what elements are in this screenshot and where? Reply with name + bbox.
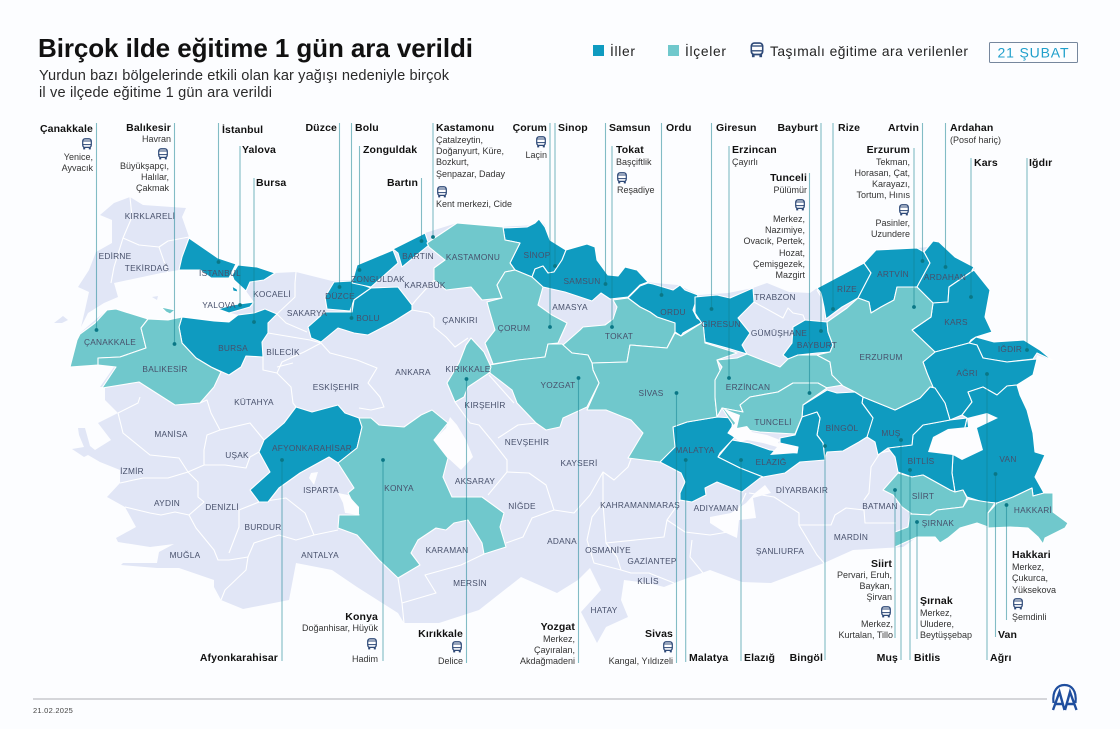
province labels: MUŞ: [881, 428, 901, 438]
legend: iller: [593, 42, 635, 59]
callout: Malatya: Malatya: [689, 652, 728, 664]
callout: Erzurum: Uzundere: [871, 229, 910, 239]
legend: iller: İller: [610, 42, 635, 59]
subtitle: Yurdun bazı bölgelerinde etkili olan kar yağışı nedeniyle birçok: [39, 68, 450, 84]
callout: Erzurum: Horasan, Çat,: [854, 168, 910, 178]
callout: Artvin: Artvin: [888, 122, 919, 134]
callout: Ağrı: Ağrı: [990, 652, 1011, 664]
callout: Balıkesir: Halılar,: [141, 172, 169, 182]
province labels: BARTIN: [402, 251, 434, 261]
callout: Balıkesir: Havran: [142, 134, 171, 144]
callout: Çanakkale: Çanakkale: [40, 123, 93, 135]
callout: Çorum: Çorum: [513, 122, 547, 134]
province labels: ŞIRNAK: [922, 518, 954, 528]
province labels: ERZURUM: [859, 352, 903, 362]
date box: 21 ŞUBAT: [998, 44, 1069, 60]
province labels: RİZE: [837, 284, 857, 294]
province labels: DÜZCE: [325, 291, 355, 301]
callout: Erzurum: [854, 144, 910, 239]
province labels: TEKİRDAĞ: [125, 263, 169, 273]
province labels: ANKARA: [395, 367, 431, 377]
callout: Kastamonu: Doğanyurt, Küre,: [436, 146, 504, 156]
callout: Sivas: Sivas: [645, 628, 673, 640]
province labels: KAHRAMANMARAŞ: [600, 500, 680, 510]
province labels: ŞANLIURFA: [756, 546, 804, 556]
province labels: GÜMÜŞHANE: [751, 328, 807, 338]
callout: Tunceli: Tunceli: [770, 172, 807, 184]
callout: Siirt: [837, 558, 893, 640]
callout: Hakkari: Şemdinli: [1012, 612, 1047, 622]
province labels: ÇORUM: [498, 323, 530, 333]
province labels: BİTLİS: [908, 456, 935, 466]
province labels: MARDİN: [834, 532, 868, 542]
callout: Afyonkarahisar: Afyonkarahisar: [200, 652, 278, 664]
province labels: SAKARYA: [287, 308, 327, 318]
province labels: BURSA: [218, 343, 248, 353]
province labels: AFYONKARAHİSAR: [272, 443, 352, 453]
callout: Bartın: Bartın: [387, 177, 418, 189]
callout: Siirt: Şirvan: [866, 592, 892, 602]
logo: AA: [1053, 685, 1076, 710]
callout: Balıkesir: Büyükşapçı,: [120, 161, 169, 171]
province labels: SİNOP: [523, 250, 551, 260]
date: 21.02.2025: [33, 706, 73, 715]
callout: İstanbul: İstanbul: [222, 123, 263, 136]
province labels: MUĞLA: [170, 550, 201, 560]
province labels: KIRKLARELİ: [125, 211, 175, 221]
callout: Yozgat: Çayıralan,: [534, 645, 575, 655]
callout: Elazığ: Elazığ: [744, 652, 775, 664]
callout: Şırnak: Şırnak: [920, 595, 953, 607]
callout: Tunceli: [743, 172, 807, 280]
callout: Tokat: Tokat: [616, 144, 644, 156]
callouts: northern provinces: [40, 122, 1052, 280]
callout: Çorum: [513, 122, 547, 160]
province labels: KÜTAHYA: [234, 397, 274, 407]
callout: Kastamonu: Kent merkezi, Cide: [436, 199, 512, 209]
callout: Siirt: Pervari, Eruh,: [837, 570, 892, 580]
province labels: EDİRNE: [99, 251, 132, 261]
callout: Iğdır: Iğdır: [1029, 157, 1052, 169]
province labels: GİRESUN: [701, 319, 741, 329]
callout: Tokat: Başçiftlik: [616, 157, 652, 167]
province labels: AYDIN: [154, 498, 180, 508]
province labels: MERSİN: [453, 578, 487, 588]
callout: Siirt: Merkez,: [861, 619, 893, 629]
province labels: KIRŞEHİR: [464, 400, 506, 410]
province labels: [84, 211, 1052, 615]
callout: Bingöl: Bingöl: [790, 652, 823, 664]
province labels: SİİRT: [912, 491, 934, 501]
province labels: DİYARBAKIR: [776, 485, 828, 495]
province labels: ARDAHAN: [924, 272, 966, 282]
province labels: ADIYAMAN: [694, 503, 738, 513]
callout: Yalova: Yalova: [242, 144, 276, 156]
province labels: TRABZON: [754, 292, 796, 302]
title: Birçok ilde eğitime 1 gün ara verildi: [38, 33, 473, 63]
map of Turkey: [54, 123, 1068, 663]
province labels: ARTVİN: [877, 269, 909, 279]
province borders: [111, 197, 896, 623]
province labels: BURDUR: [244, 522, 282, 532]
callout: Erzincan: Erzincan: [732, 144, 777, 156]
province labels: YALOVA: [202, 300, 236, 310]
callout: Balıkesir: [120, 122, 171, 193]
callout: Çanakkale: [40, 123, 93, 173]
callout: Erzurum: Erzurum: [867, 144, 910, 156]
province labels: HAKKARİ: [1014, 505, 1052, 515]
callout: Sivas: [609, 628, 673, 666]
callout: Hakkari: [1012, 549, 1056, 622]
province labels: KASTAMONU: [446, 252, 500, 262]
legend: taşımalı eğitim: Taşımalı eğitime ara verilenler: [770, 44, 968, 59]
callout: Bayburt: Bayburt: [777, 122, 818, 134]
province labels: ADANA: [547, 536, 577, 546]
province labels: BAYBURT: [797, 340, 837, 350]
province labels: VAN: [999, 454, 1017, 464]
callout: Siirt: Siirt: [871, 558, 892, 570]
province labels: AĞRI: [956, 368, 978, 378]
province labels: KONYA: [384, 483, 414, 493]
callout: Kastamonu: [436, 122, 512, 209]
callout: Tunceli: Mazgirt: [775, 270, 805, 280]
callout: Kars: Kars: [974, 157, 998, 169]
callout: Hakkari: Çukurca,: [1012, 573, 1048, 583]
callout: Zonguldak: Zonguldak: [363, 144, 417, 156]
province labels: MALATYA: [675, 445, 715, 455]
callout: Bolu: Bolu: [355, 122, 379, 134]
callout: Çorum: Laçin: [525, 150, 547, 160]
callout: Tunceli: Merkez,: [773, 214, 805, 224]
callout: Tokat: Reşadiye: [617, 185, 655, 195]
province labels: KİLİS: [637, 576, 659, 586]
callouts: southern provinces: [200, 549, 1056, 666]
callout: Van: Van: [998, 629, 1017, 641]
province labels: BOLU: [356, 313, 380, 323]
province labels: YOZGAT: [540, 380, 576, 390]
province labels: ESKİŞEHİR: [313, 382, 359, 392]
callout: Tunceli: Çemişgezek,: [753, 259, 805, 269]
callout: Kırıkkale: Delice: [438, 656, 463, 666]
province labels: BALIKESİR: [142, 364, 188, 374]
callout: Bursa: Bursa: [256, 177, 286, 189]
province labels: BİLECİK: [266, 347, 300, 357]
leader lines: [96, 123, 1027, 663]
callout: Ardahan: [950, 122, 1001, 145]
callout: Ordu: Ordu: [666, 122, 692, 134]
province labels: AMASYA: [552, 302, 588, 312]
province labels: ERZİNCAN: [726, 382, 770, 392]
callout: Konya: Doğanhisar, Hüyük: [302, 623, 378, 633]
callout: Erzurum: Tekman,: [876, 157, 910, 167]
callout: Rize: Rize: [838, 122, 860, 134]
province labels: BATMAN: [862, 501, 898, 511]
province labels: ÇANAKKALE: [84, 337, 136, 347]
callout: Tokat: [616, 144, 655, 195]
callout: Erzurum: Karayazı,: [872, 179, 910, 189]
province labels: BİNGÖL: [826, 423, 859, 433]
province labels: ZONGULDAK: [351, 274, 405, 284]
callout: Yozgat: [520, 621, 575, 666]
callout: Şırnak: Merkez,: [920, 608, 952, 618]
callout: Hakkari: Merkez,: [1012, 562, 1044, 572]
callout: Tunceli: Ovacık, Pertek,: [743, 236, 805, 246]
province labels: OSMANİYE: [585, 545, 631, 555]
callout: Ardahan: Ardahan: [950, 122, 993, 134]
province labels: İSTANBUL: [199, 268, 241, 278]
callout: Ardahan: (Posof hariç): [950, 135, 1001, 145]
province labels: IĞDIR: [998, 344, 1022, 354]
province labels: SAMSUN: [564, 276, 600, 286]
callout: Hakkari: Yüksekova: [1012, 585, 1056, 595]
province labels: ÇANKIRI: [442, 315, 478, 325]
province labels: AKSARAY: [455, 476, 495, 486]
province labels: İZMİR: [120, 466, 144, 476]
callout: Balıkesir: Balıkesir: [126, 122, 171, 134]
callout: Kastamonu: Çatalzeytin,: [436, 135, 483, 145]
province labels: MANİSA: [154, 429, 188, 439]
province labels: TUNCELİ: [754, 417, 792, 427]
callout: Tunceli: Hozat,: [779, 248, 805, 258]
callout: Bitlis: Bitlis: [914, 652, 940, 664]
callout: Erzincan: [732, 144, 777, 167]
callout: Yozgat: Merkez,: [543, 634, 575, 644]
colored provinces: ilçeler: [70, 223, 1068, 578]
province labels: SİVAS: [638, 388, 664, 398]
province labels: NEVŞEHİR: [505, 437, 549, 447]
callout: Konya: Konya: [345, 611, 378, 623]
callout: Şırnak: Beytüşşebap: [920, 630, 972, 640]
callout: Şırnak: Uludere,: [920, 619, 954, 629]
province labels: ISPARTA: [303, 485, 339, 495]
province labels: KAYSERİ: [560, 458, 598, 468]
callout: Sinop: Sinop: [558, 122, 588, 134]
province labels: KARABÜK: [404, 280, 446, 290]
callout: Kastamonu: Bozkurt,: [436, 157, 469, 167]
callout: Erzincan: Çayırlı: [732, 157, 758, 167]
callout: Erzurum: Tortum, Hınıs: [856, 190, 910, 200]
callout: Siirt: Kurtalan, Tillo: [838, 630, 893, 640]
callout: Konya: [302, 611, 378, 664]
callout: Balıkesir: Çakmak: [136, 183, 169, 193]
province labels: KARAMAN: [426, 545, 468, 555]
province labels: ORDU: [660, 307, 686, 317]
callout: Konya: Hadim: [352, 654, 378, 664]
province labels: KIRIKKALE: [445, 364, 491, 374]
callout: Hakkari: Hakkari: [1012, 549, 1051, 561]
callout: Şırnak: [920, 595, 972, 640]
province labels: GAZİANTEP: [627, 556, 677, 566]
callout: Erzurum: Pasinler,: [875, 218, 910, 228]
callout: Düzce: Düzce: [305, 122, 337, 134]
province labels: ELAZIĞ: [755, 457, 787, 467]
callout: Kastamonu: Kastamonu: [436, 122, 494, 134]
subtitle: [39, 68, 450, 101]
base map: [54, 197, 1068, 643]
callout: Muş: Muş: [877, 652, 898, 664]
callout: Samsun: Samsun: [609, 122, 651, 134]
legend: ilçeler: İlçeler: [685, 42, 726, 59]
province labels: TOKAT: [605, 331, 633, 341]
callout: Giresun: Giresun: [716, 122, 757, 134]
callout: Çanakkale: Ayvacık: [62, 163, 93, 173]
leader dots: [95, 235, 1029, 524]
province labels: KARS: [944, 317, 968, 327]
callout: Tunceli: Nazımiye,: [765, 225, 805, 235]
callout: Kırıkkale: Kırıkkale: [418, 628, 463, 640]
date box: [990, 42, 1078, 62]
footer rule: [33, 698, 1047, 700]
province labels: KOCAELİ: [253, 289, 291, 299]
lakes: [309, 408, 998, 538]
callout: Kastamonu: Şenpazar, Daday: [436, 169, 506, 179]
callout: Siirt: Baykan,: [859, 581, 892, 591]
colored provinces: iller: [179, 219, 1052, 503]
legend: ilçeler: [668, 42, 726, 59]
province labels: UŞAK: [225, 450, 249, 460]
legend: [593, 42, 968, 59]
callout: Tunceli: Pülümür: [773, 185, 807, 195]
province labels: DENİZLİ: [205, 502, 239, 512]
callout: Sivas: Kangal, Yıldızeli: [609, 656, 673, 666]
callout: Çanakkale: Yenice,: [64, 152, 93, 162]
province labels: NİĞDE: [508, 501, 536, 511]
callout: Yozgat: Yozgat: [541, 621, 575, 633]
province labels: HATAY: [590, 605, 618, 615]
province labels: ANTALYA: [301, 550, 339, 560]
callout: Kırıkkale: [418, 628, 463, 666]
callout: Yozgat: Akdağmadeni: [520, 656, 575, 666]
subtitle: il ve ilçede eğitime 1 gün ara verildi: [39, 85, 272, 101]
